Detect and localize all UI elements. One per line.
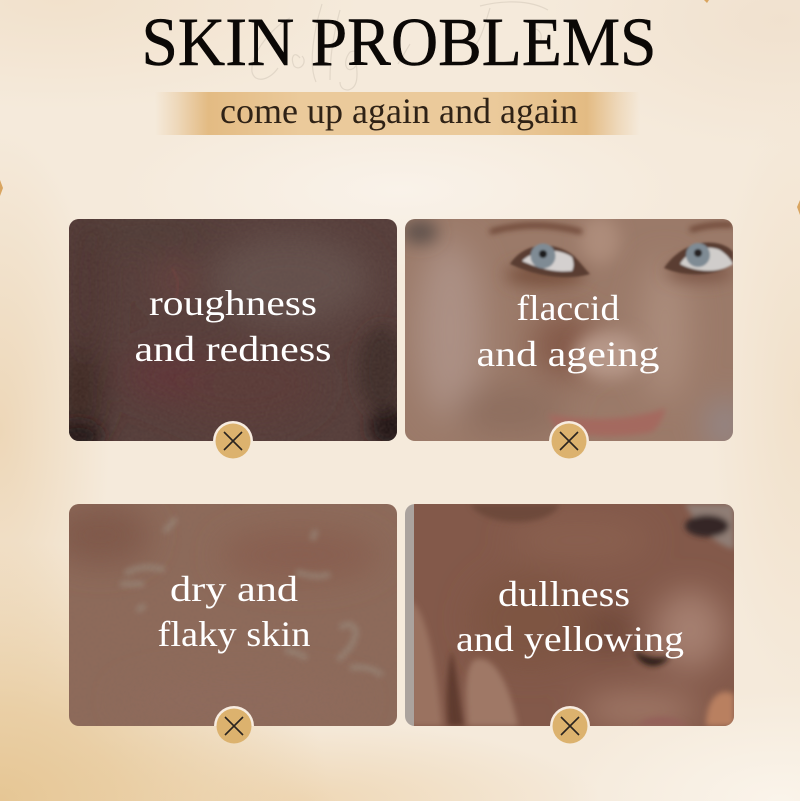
label: flaccid	[516, 288, 620, 328]
label	[456, 574, 684, 659]
icon: cross badge	[549, 421, 589, 458]
panel: roughness and redness	[69, 219, 397, 458]
label: roughness	[149, 283, 317, 323]
panel: dry and flaky skin	[50, 504, 397, 744]
eyes	[510, 242, 733, 277]
subtitle banner	[155, 91, 640, 135]
label: dry and	[170, 569, 298, 609]
title: SKIN PROBLEMS	[142, 4, 656, 80]
label: and redness	[134, 329, 332, 369]
label: and yellowing	[456, 619, 684, 659]
panel: dullness and yellowing	[405, 504, 734, 744]
label	[476, 288, 660, 374]
panel: flaccid and ageing	[402, 216, 743, 458]
label	[134, 283, 332, 369]
label: flaky skin	[158, 614, 310, 654]
watermark script	[252, 2, 583, 90]
subtitle banner: come up again and again	[220, 91, 578, 131]
label: and ageing	[476, 334, 660, 374]
icon: cross badge	[214, 706, 254, 744]
icon: cross badge	[213, 421, 253, 458]
corner gold flecks	[0, 0, 800, 215]
label	[158, 569, 310, 654]
label: dullness	[498, 574, 630, 614]
icon: cross badge	[550, 706, 590, 744]
